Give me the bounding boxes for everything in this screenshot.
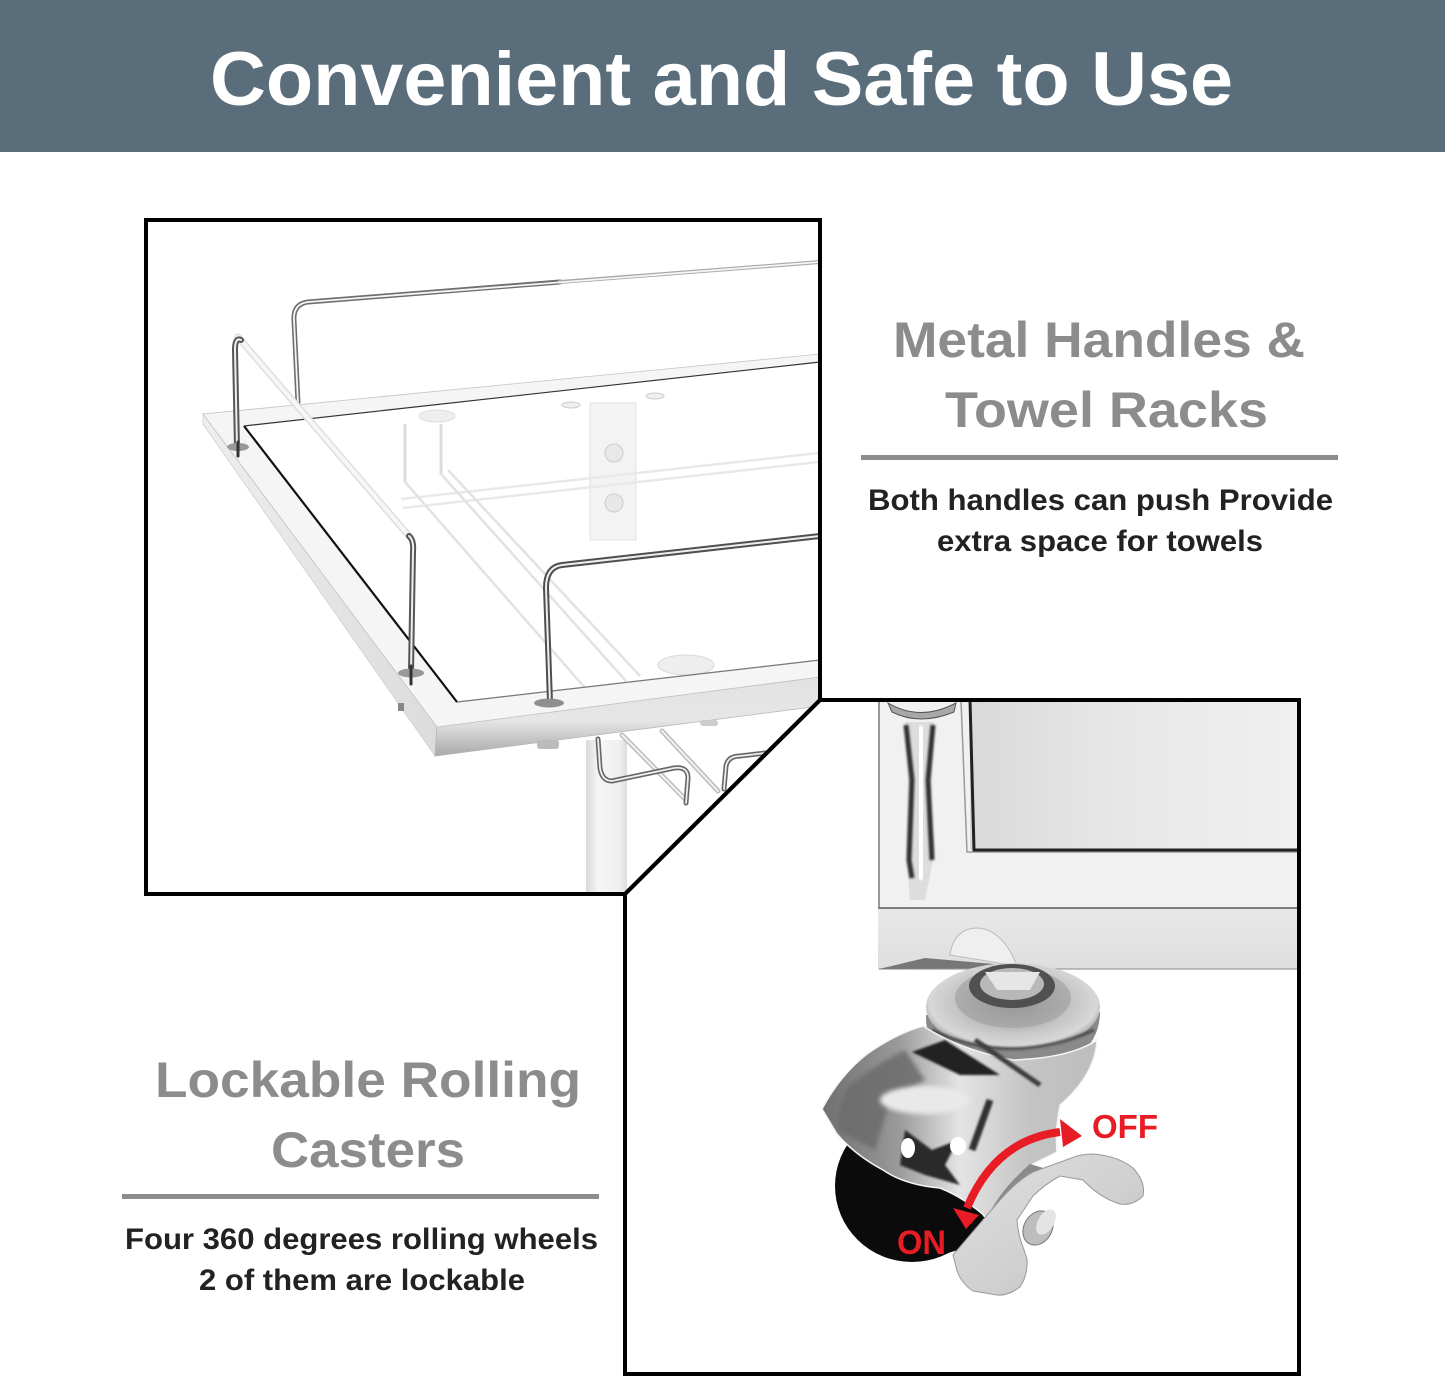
left handle xyxy=(227,337,424,684)
caster wheel xyxy=(835,1146,984,1262)
heading: lockable casters: Lockable Rolling xyxy=(155,1052,581,1108)
panel: metal handles and towel racks photo xyxy=(146,220,820,894)
tray glass reflections xyxy=(401,393,819,689)
towel rack hooks xyxy=(598,731,765,803)
panel: lockable caster photo xyxy=(625,700,1299,1374)
caster bolt cap xyxy=(950,928,1017,966)
heading: lockable casters xyxy=(155,1052,581,1178)
heading: metal handles: Metal Handles & xyxy=(893,312,1305,368)
description: metal handles: extra space for towels xyxy=(937,525,1263,558)
lock arrow xyxy=(953,1119,1082,1229)
description: metal handles: Both handles can push Provide xyxy=(868,484,1333,517)
label: on: ON xyxy=(897,1224,946,1262)
handle post xyxy=(888,703,956,900)
description: lockable casters: Four 360 degrees rolling wheels xyxy=(125,1223,598,1256)
caster top plate xyxy=(926,963,1100,1060)
description: lockable casters xyxy=(125,1223,598,1297)
panel border xyxy=(625,700,1299,1374)
header banner xyxy=(0,0,1445,152)
column under tray xyxy=(586,740,627,892)
heading: metal handles xyxy=(893,312,1305,438)
heading: metal handles: Towel Racks xyxy=(945,382,1268,438)
steel frame corner xyxy=(878,700,1299,969)
panel border xyxy=(146,220,820,894)
title: Convenient and Safe to Use xyxy=(210,37,1233,122)
tray frame xyxy=(203,354,820,756)
description: metal handles xyxy=(868,484,1333,558)
front handle xyxy=(534,536,820,708)
label: off: OFF xyxy=(1092,1108,1158,1145)
caster lock lever xyxy=(953,1154,1144,1295)
heading: lockable casters: Casters xyxy=(271,1122,465,1178)
caster chrome hood xyxy=(822,1026,1097,1224)
description: lockable casters: 2 of them are lockable xyxy=(199,1264,525,1297)
back handle xyxy=(294,262,820,403)
